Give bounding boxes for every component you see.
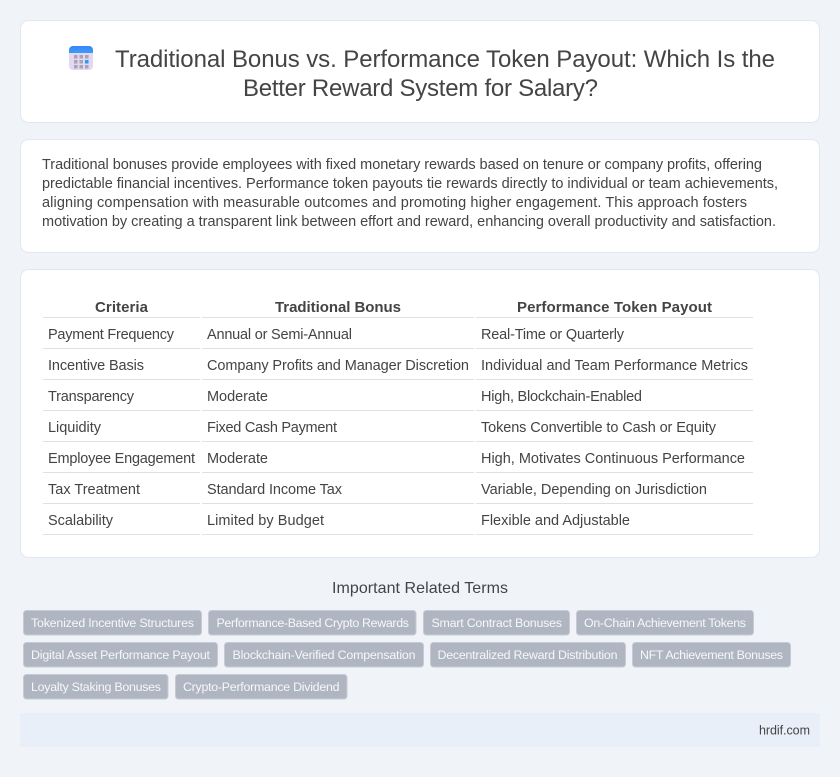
related term tags (24, 610, 790, 699)
row: employee engagement: High, Motivates Continuous Performance (481, 451, 745, 467)
summary paragraph: Traditional bonuses provide employees with fixed monetary rewards based on tenure or company profits, offering (42, 157, 762, 173)
row: liquidity (48, 420, 717, 436)
row: liquidity: Fixed Cash Payment (207, 420, 337, 436)
row: incentive basis: Incentive Basis (48, 358, 144, 374)
row: incentive basis (48, 358, 748, 374)
related term tags: Performance-Based Crypto Rewards (216, 616, 409, 630)
footer bar (20, 713, 820, 747)
row: tax treatment: Variable, Depending on Jurisdiction (481, 482, 707, 498)
row: payment frequency: Annual or Semi-Annual (207, 327, 352, 343)
row: transparency: High, Blockchain-Enabled (481, 389, 642, 405)
row: transparency (48, 389, 642, 405)
related term tags: Digital Asset Performance Payout (31, 648, 211, 662)
row: employee engagement (48, 451, 745, 467)
title (115, 46, 775, 102)
related term tags: Blockchain-Verified Compensation (232, 648, 416, 662)
row: scalability (48, 513, 630, 529)
row: transparency: Moderate (207, 389, 268, 405)
table header row (95, 299, 712, 316)
row: tax treatment: Standard Income Tax (207, 482, 343, 498)
related term tags: Crypto-Performance Dividend (183, 680, 340, 694)
related term tags: Decentralized Reward Distribution (438, 648, 618, 662)
row: employee engagement: Moderate (207, 451, 268, 467)
row: payment frequency (48, 327, 625, 343)
table header row: Traditional Bonus (275, 299, 401, 316)
icon: calendar (69, 46, 93, 70)
row: transparency: Transparency (48, 389, 135, 405)
row: employee engagement: Employee Engagement (48, 451, 195, 467)
panel: summary text (20, 140, 820, 252)
related term tags: On-Chain Achievement Tokens (584, 616, 746, 630)
row: scalability: Scalability (48, 513, 114, 529)
footer site name: hrdif.com (759, 724, 810, 738)
panel: comparison table (20, 270, 820, 558)
table header row: Performance Token Payout (517, 299, 712, 316)
related term tags: Tokenized Incentive Structures (31, 616, 194, 630)
summary paragraph: motivation by creating a transparent link between effort and reward, enhancing overall productivity and satisfaction. (42, 214, 776, 230)
related term tags: Smart Contract Bonuses (432, 616, 562, 630)
row: payment frequency: Real-Time or Quarterly (481, 327, 625, 343)
title: Better Reward System for Salary? (243, 75, 598, 102)
row: scalability: Flexible and Adjustable (481, 513, 630, 529)
panel: title header (20, 20, 820, 122)
row: tax treatment (48, 482, 707, 498)
row: tax treatment: Tax Treatment (48, 482, 140, 498)
row: incentive basis: Company Profits and Manager Discretion (207, 358, 469, 374)
table header row: Criteria (95, 299, 149, 316)
row: incentive basis: Individual and Team Performance Metrics (481, 358, 748, 374)
related term tags: Loyalty Staking Bonuses (31, 680, 161, 694)
summary paragraph: aligning compensation with measurable outcomes and promoting higher engagement. This approach fosters (42, 195, 747, 211)
row: scalability: Limited by Budget (207, 513, 324, 529)
title: Traditional Bonus vs. Performance Token Payout: Which Is the (115, 46, 775, 73)
summary paragraph: predictable financial incentives. Performance token payouts tie rewards directly to individual or team achievements, (42, 176, 778, 192)
row: payment frequency: Payment Frequency (48, 327, 175, 343)
row: liquidity: Liquidity (48, 420, 102, 436)
row: liquidity: Tokens Convertible to Cash or Equity (481, 420, 717, 436)
summary paragraph (42, 157, 778, 230)
heading: important related terms: Important Related Terms (332, 580, 508, 597)
related term tags: NFT Achievement Bonuses (640, 648, 783, 662)
